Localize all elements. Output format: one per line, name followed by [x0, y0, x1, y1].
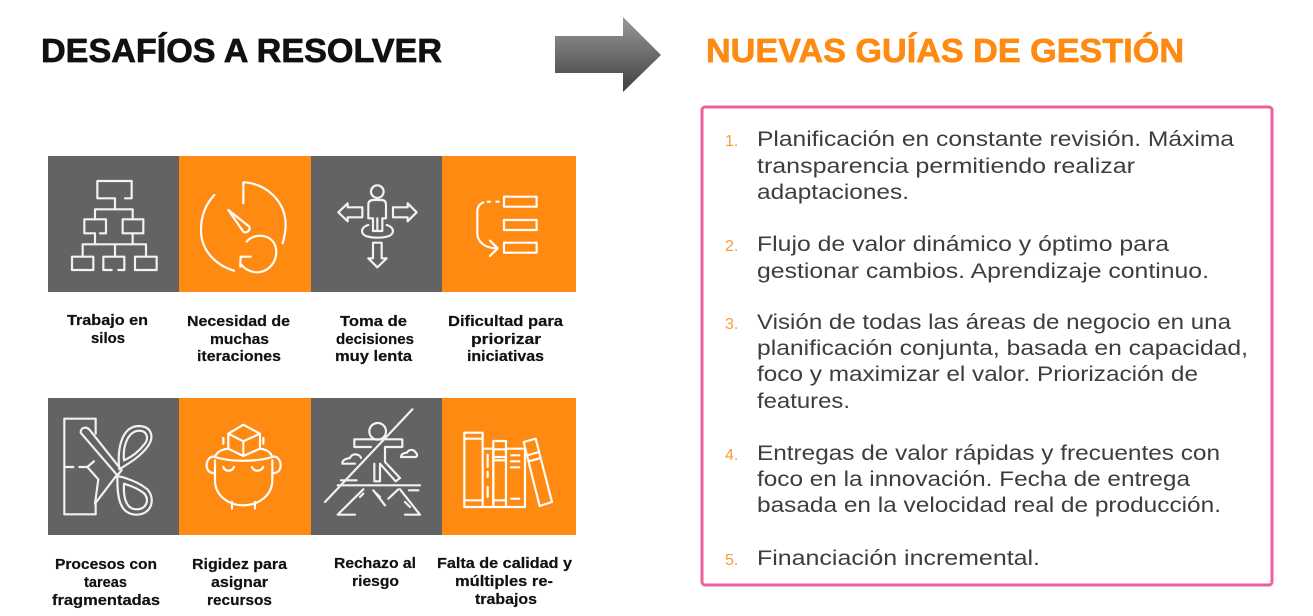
item 2: gestionar cambios. Aprendizaje continuo. — [757, 259, 1209, 283]
panel: guidelines box — [702, 107, 1272, 585]
item 1: transparencia permitiendo realizar — [757, 154, 1135, 178]
tile: dificultad para priorizar iniciativas — [442, 156, 576, 365]
item 4: basada en la velocidad real de producción. — [757, 493, 1221, 517]
tile: procesos con tareas fragmentadas — [48, 398, 179, 609]
label: múltiples re- — [455, 574, 553, 590]
tile: toma de decisiones muy lenta — [311, 156, 442, 365]
icon: books — [464, 433, 552, 507]
tile: trabajo en silos — [48, 156, 179, 347]
item 1: 1. — [725, 133, 738, 150]
label — [67, 313, 148, 347]
icon: hierarchy — [72, 181, 157, 270]
label: Trabajo en — [67, 313, 148, 329]
label — [334, 556, 416, 590]
label: Procesos con — [55, 557, 157, 573]
item 1: Planificación en constante revisión. Máxima — [757, 127, 1234, 151]
tile: rechazo al riesgo — [311, 398, 442, 590]
item 3: Visión de todas las áreas de negocio en una — [757, 310, 1231, 334]
panel: challenges grid — [48, 156, 576, 609]
label: Toma de — [340, 314, 407, 330]
label: fragmentadas — [52, 593, 160, 609]
tile: necesidad de muchas iteraciones — [179, 156, 311, 365]
label: riesgo — [352, 574, 399, 590]
item 3: foco y maximizar el valor. Priorización de — [757, 362, 1198, 386]
icon: person with arrows — [338, 185, 417, 267]
item 2: 2. — [725, 238, 738, 255]
label: recursos — [207, 593, 272, 609]
label: tareas — [84, 575, 127, 591]
icon: reordered list — [477, 197, 537, 256]
item 5: Financiación incremental. — [757, 546, 1040, 570]
title: desafíos a resolver: DESAFÍOS A RESOLVER — [41, 32, 442, 69]
item 1 — [725, 127, 1234, 204]
item 3: planificación conjunta, basada en capacidad, — [757, 336, 1248, 360]
item 4: 4. — [725, 447, 738, 464]
label: Necesidad de — [187, 314, 290, 330]
tile: rigidez para asignar recursos — [179, 398, 311, 609]
label: Falta de calidad y — [437, 556, 572, 572]
label — [192, 557, 288, 609]
label: asignar — [211, 575, 268, 591]
label: iniciativas — [467, 349, 544, 365]
label — [448, 314, 564, 365]
label: Dificultad para — [448, 314, 564, 330]
label: Rigidez para — [192, 557, 288, 573]
item 2 — [725, 232, 1209, 283]
item 3: features. — [757, 389, 850, 413]
icon: gauge with loop — [201, 182, 286, 272]
icon: crossed tightrope walker — [325, 409, 420, 515]
item 1: adaptaciones. — [757, 180, 909, 204]
label: decisiones — [336, 332, 414, 348]
label: priorizar — [471, 332, 541, 348]
icon: head with cube — [207, 425, 281, 509]
tile: falta de calidad y múltiples re-trabajos — [437, 398, 576, 608]
item 5: 5. — [725, 552, 738, 569]
label — [52, 557, 160, 609]
item 3: 3. — [725, 316, 738, 333]
label: muchas — [210, 332, 269, 348]
label — [437, 556, 572, 608]
label: silos — [91, 331, 125, 347]
label: trabajos — [475, 592, 537, 608]
item 3 — [725, 310, 1248, 413]
label: Rechazo al — [334, 556, 416, 572]
item 4 — [725, 441, 1221, 517]
title: nuevas guías de gestión: NUEVAS GUÍAS DE GESTIÓN — [706, 32, 1184, 69]
item 4: foco en la innovación. Fecha de entrega — [757, 467, 1190, 491]
label — [187, 314, 290, 365]
label: muy lenta — [335, 349, 413, 365]
item 2: Flujo de valor dinámico y óptimo para — [757, 232, 1169, 256]
icon: scissors cutting paper — [64, 419, 152, 515]
item 4: Entregas de valor rápidas y frecuentes con — [757, 441, 1220, 465]
arrow — [555, 17, 661, 92]
label: iteraciones — [197, 349, 281, 365]
label — [335, 314, 414, 365]
